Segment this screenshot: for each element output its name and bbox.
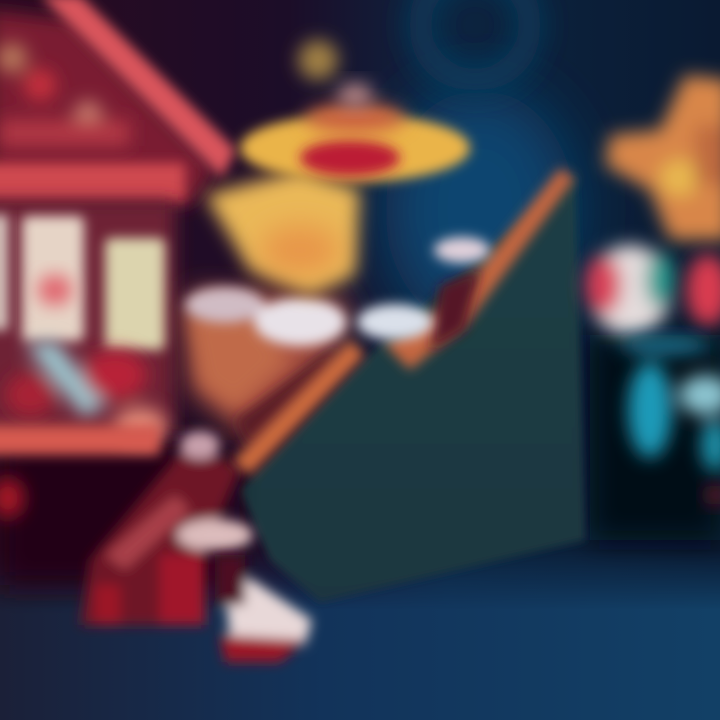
lintel [0, 163, 185, 201]
balloon right [686, 254, 720, 326]
dark hand shadow [430, 270, 480, 350]
figure [80, 40, 575, 662]
upper rail [385, 168, 575, 370]
teal wall [240, 175, 585, 602]
sombrero brim [240, 114, 470, 182]
counter goods [5, 340, 166, 443]
window right [105, 238, 165, 350]
orange shade [260, 225, 340, 275]
floor [0, 550, 720, 720]
hat tip [337, 83, 373, 107]
building dark base [0, 440, 230, 585]
building [0, 0, 236, 585]
window left red mark [38, 275, 72, 305]
leg stripes [80, 431, 253, 625]
building upper wall [0, 10, 215, 205]
boot [215, 555, 312, 662]
blue ring top [420, 0, 530, 80]
red spot lower left [0, 478, 24, 518]
sombrero red band [300, 140, 400, 176]
torso arm [185, 310, 290, 410]
counter beam [0, 425, 160, 455]
yellow body [205, 170, 360, 295]
right dark backdrop [590, 335, 720, 540]
ladder dark rungs [235, 345, 340, 450]
right figure [585, 75, 720, 505]
upper wall ornaments [0, 43, 130, 146]
window far left [0, 215, 8, 330]
small red dot [706, 485, 720, 505]
roof beam [40, 0, 236, 178]
balloon cluster left [585, 245, 674, 335]
sombrero crown [305, 103, 405, 133]
white collar band [185, 237, 490, 346]
lower ladder rail [232, 340, 365, 475]
lower wall [0, 200, 175, 435]
orange cross [605, 75, 720, 240]
gold spot [298, 40, 338, 80]
cyan shapes [620, 335, 720, 471]
figure backing [190, 290, 350, 440]
window left [22, 216, 84, 341]
